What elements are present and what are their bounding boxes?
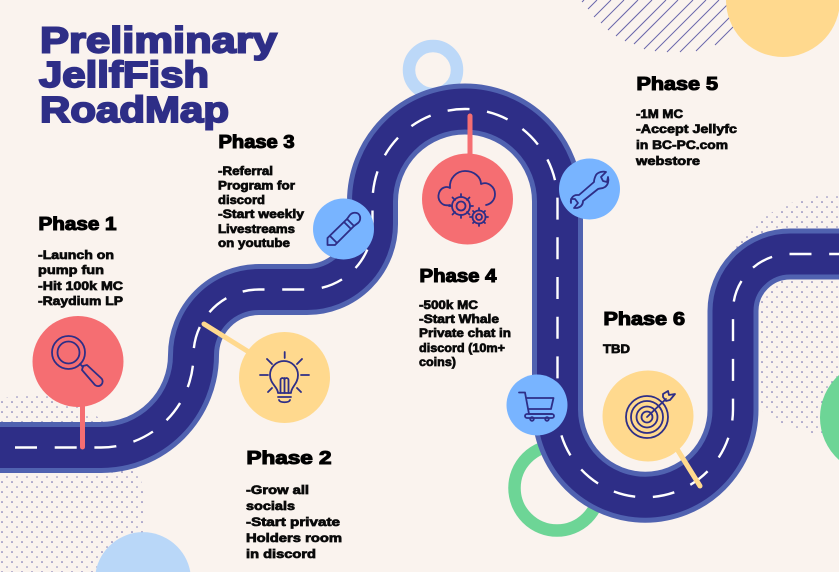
phase 6 marker	[602, 370, 700, 486]
phase 4 text: Private chat in	[419, 326, 511, 340]
phase 1 text: -Raydium LP	[38, 294, 123, 308]
phase 3 text: Livestreams	[218, 222, 295, 236]
phase 5 text: webstore	[635, 154, 700, 168]
icon: wrench	[571, 172, 608, 208]
phase 1 marker	[32, 316, 124, 447]
phase 1 text: -Hit 100k MC	[38, 279, 123, 293]
icon: target	[626, 391, 675, 438]
phase 3 text: -Referral	[218, 164, 273, 178]
phase 3 text: Program for	[218, 178, 295, 192]
light blue ring	[409, 46, 457, 94]
phase 3 text	[218, 132, 304, 250]
green circle right	[820, 375, 839, 460]
phase 4 text	[419, 266, 511, 369]
phase 6 text: TBD	[603, 342, 630, 356]
cart marker	[506, 374, 568, 436]
phase 6 text: Phase 6	[604, 309, 685, 329]
hatched texture: top right	[582, 0, 760, 52]
phase 5 text: -1M MC	[636, 107, 683, 121]
dotted texture: right	[714, 195, 839, 435]
yellow circle top right	[726, 0, 839, 57]
phase 6 text	[603, 309, 685, 356]
title	[39, 20, 277, 130]
icon: pencil	[328, 213, 360, 245]
icon: light bulb	[260, 352, 309, 402]
icon: magnifier	[52, 336, 103, 386]
title: Preliminary	[40, 20, 277, 60]
light blue circle bottom	[96, 532, 190, 572]
phase 4 text: -Start Whale	[419, 312, 499, 326]
title: RoadMap	[40, 89, 229, 130]
phase 3 text: discord	[218, 193, 265, 207]
phase 4 text: discord (10m+	[419, 341, 505, 355]
phase 5 text: -Accept Jellyfc	[636, 122, 737, 136]
phase 5 marker	[559, 158, 620, 220]
phase 1 text: pump fun	[38, 263, 104, 277]
icon: shopping cart	[519, 392, 554, 421]
phase 3 text: Phase 3	[218, 132, 294, 152]
phase 2 text: in discord	[246, 547, 316, 561]
phase 2 text: -Grow all	[246, 483, 309, 497]
phase 2 text: socials	[246, 499, 295, 513]
phase 2 text: Phase 2	[246, 448, 332, 468]
phase 5 text: Phase 5	[636, 74, 718, 94]
phase 1 text: -Launch on	[38, 248, 114, 262]
phase 2 text	[246, 448, 342, 561]
phase 4 text: coins)	[419, 355, 456, 369]
icon: cloud with gears	[438, 171, 495, 226]
road	[0, 109, 839, 497]
phase 1 text: Phase 1	[38, 214, 116, 234]
phase 4 text: Phase 4	[420, 266, 496, 286]
title: JellfFish	[39, 54, 209, 95]
phase 2 text: -Start private	[246, 515, 340, 529]
phase 5 text: in BC-PC.com	[636, 138, 728, 152]
dotted texture: bottom left	[0, 395, 145, 572]
phase 4 marker	[422, 116, 513, 244]
phase 2 marker	[204, 324, 330, 423]
phase 3 text: -Start weekly	[218, 207, 304, 221]
phase 1 text	[38, 214, 123, 308]
phase 2 text: Holders room	[246, 531, 342, 545]
phase 5 text	[635, 74, 737, 168]
green ring	[514, 446, 600, 530]
phase 3 marker	[313, 198, 374, 260]
phase 4 text: -500k MC	[419, 298, 478, 312]
phase 3 text: on youtube	[218, 236, 290, 250]
